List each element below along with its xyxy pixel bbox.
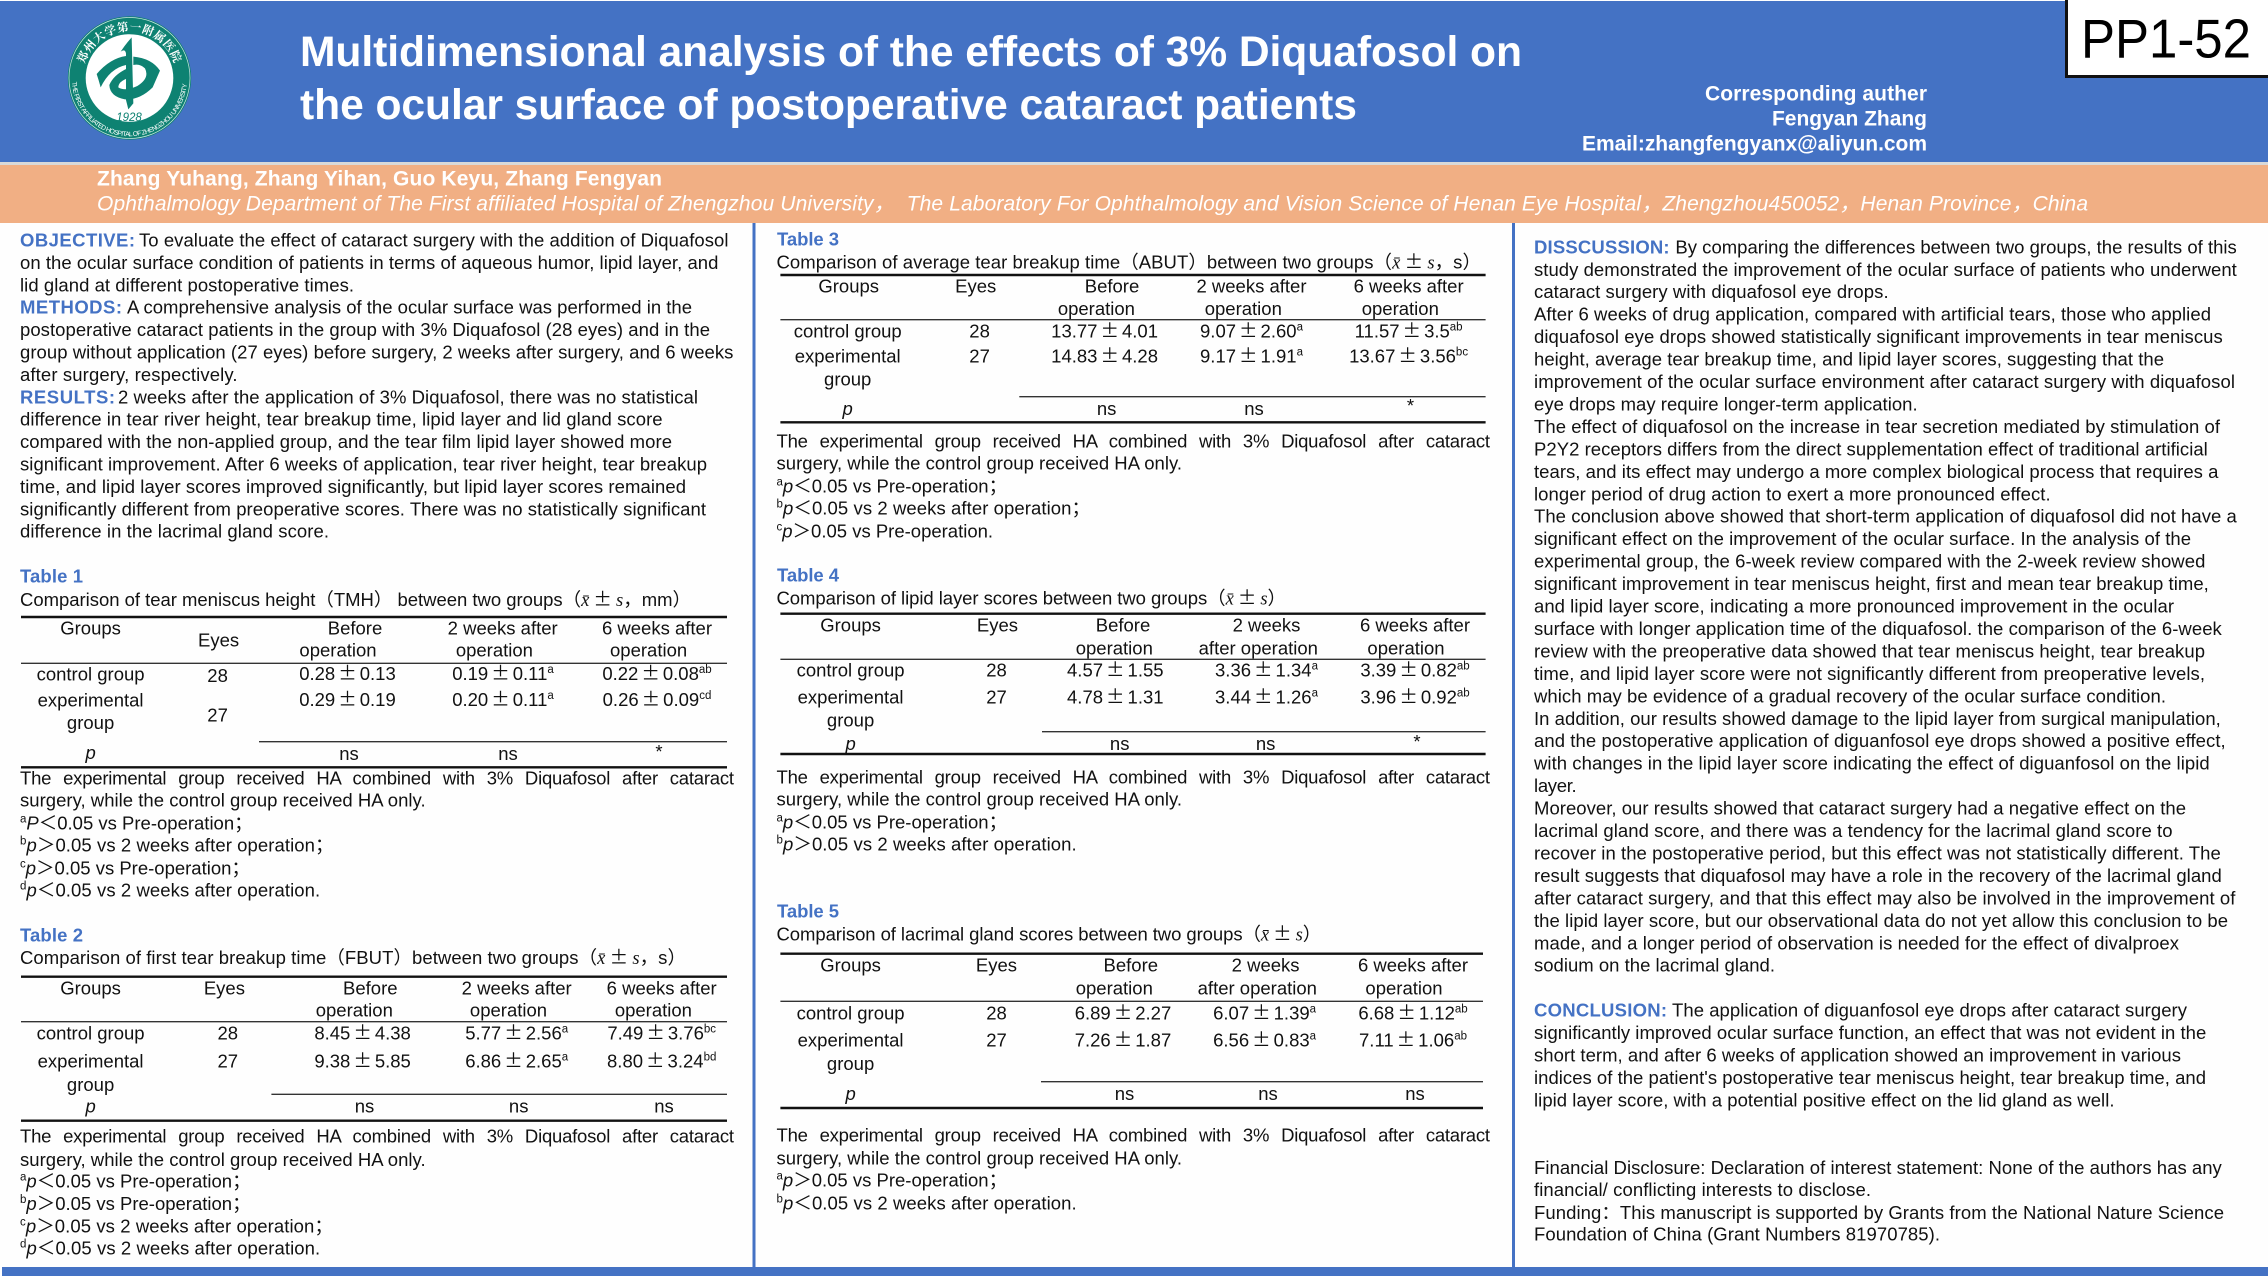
panel: disclosure and funding — [1534, 1157, 2224, 1244]
table 4 data: 28 — [986, 659, 1007, 680]
table 5 notes: ＜0.05 vs 2 weeks after operation. — [793, 1192, 1077, 1213]
table 2 data: ns — [355, 1096, 374, 1117]
affiliation: Ophthalmology Department of The First affiliated Hospital of Zhengzhou University， The Laboratory For Ophthalmology and Vision Science of Henan Eye Hospital，Zhengzhou450052，Henan Province，China — [97, 192, 2088, 216]
table 1 notes: ＜0.05 vs 2 weeks after operation. — [37, 880, 320, 901]
table 5 data: 6.56±0.83 — [1213, 1026, 1310, 1052]
table 4 data: 27 — [986, 687, 1007, 708]
table 1 data: 2 weeks after — [448, 618, 558, 639]
table 4 notes: b — [776, 834, 783, 846]
panel: conclusion: indices of the patient's postoperative tear meniscus height, tear breakup time, and — [1534, 1067, 2206, 1088]
table 3 notes: b — [776, 498, 783, 510]
table 4 data: 6 weeks after — [1360, 614, 1470, 635]
table 1 notes: ＜0.05 vs Pre-operation； — [39, 812, 253, 833]
table 5 data: 6.89±2.27 — [1075, 999, 1171, 1025]
table 1 notes: p — [25, 880, 37, 901]
panel: abstract: 2 weeks after the application of 3% Diquafosol, there was no statistical — [118, 386, 698, 407]
table 3 data: ns — [1244, 398, 1264, 419]
table 5 data: 27 — [986, 1029, 1007, 1050]
table 2 notes: p — [25, 1171, 37, 1192]
table 2 data: Eyes — [204, 978, 245, 999]
table 3 data: operation — [1205, 298, 1282, 319]
table 4 notes: ＞0.05 vs 2 weeks after operation. — [793, 833, 1077, 854]
table 2 data: Groups — [60, 978, 121, 999]
poster number box: PP1-52 — [2081, 8, 2251, 70]
table 5 notes: ＞0.05 vs Pre-operation； — [793, 1170, 1007, 1191]
table 3 data: a — [1297, 346, 1304, 358]
table 5 notes: p — [782, 1192, 793, 1213]
table 2 data: p — [84, 1096, 96, 1117]
table 2 notes: p — [25, 1215, 36, 1236]
panel: abstract: compared with the non-applied group, and the tear film lipid layer showed more — [20, 431, 672, 452]
table 2 data: 9.38±5.85 — [314, 1047, 411, 1073]
panel: discussion: significant improvement in tear meniscus height, first and mean tear breakup time, — [1534, 573, 2209, 594]
panel: abstract: METHODS: — [20, 297, 122, 318]
column dividers — [752, 223, 1515, 1267]
panel: abstract: postoperative cataract patients in the group with 3% Diquafosol (28 eyes) and in the — [20, 319, 710, 340]
table 1 notes: The experimental group received HA combined with 3% Diquafosol after cataract — [20, 768, 734, 789]
table 3 notes — [776, 430, 1490, 541]
table 3 data: operation — [1362, 298, 1439, 319]
table 4 data: 2 weeks — [1233, 614, 1300, 635]
panel: disclosure and funding: Financial Disclosure: Declaration of interest statement: None of the authors has any — [1534, 1157, 2223, 1178]
panel: discussion: Moreover, our results showed that cataract surgery had a negative effect on the — [1534, 798, 2186, 819]
panel: discussion: recover in the postoperative period, but this effect was not statistically different. The — [1534, 842, 2221, 864]
table 3 notes: surgery, while the control group received HA only. — [776, 452, 1182, 473]
table 2 data: bd — [704, 1051, 716, 1063]
table 1 data: a — [547, 690, 554, 702]
table 4 data: ns — [1110, 733, 1129, 754]
table 2 notes: d — [20, 1238, 26, 1250]
corresponding author: Fengyan Zhang — [1772, 108, 1927, 130]
table 4 data: 3.39±0.82 — [1360, 656, 1457, 682]
panel: table 2 — [20, 925, 734, 1258]
panel: discussion: made, and a longer period of observation is needed for the effect of divalproex — [1534, 932, 2180, 953]
table 3 data: bc — [1456, 346, 1468, 358]
table 5 data: 6 weeks after — [1358, 954, 1468, 975]
table 2 data: 2 weeks after — [462, 978, 572, 999]
table 4 caption: Comparison of lipid layer scores between two groups（x̄ ± s） — [776, 584, 1286, 610]
panel: discussion: improvement of the ocular surface environment after cataract surgery with diquafosol — [1534, 371, 2235, 392]
panel: discussion: sodium on the lacrimal gland. — [1534, 955, 1775, 976]
panel: discussion: and the postoperative application of diguanfosol eye drops showed a positive effect, — [1534, 730, 2226, 751]
table 5 data: operation — [1365, 977, 1443, 998]
table 1 data: 0.20±0.11 — [452, 686, 547, 712]
table 3 notes: a — [776, 476, 784, 488]
table 1 data: 0.19±0.11 — [452, 660, 547, 686]
panel: abstract: significant improvement. After 6 weeks of application, tear river height, tear breakup — [20, 454, 707, 474]
panel: abstract: on the ocular surface condition of patients in terms of aqueous humor, lipid layer, and — [20, 252, 718, 273]
table 3 data: ab — [1450, 321, 1463, 333]
table 3 notes: p — [781, 520, 793, 541]
panel: abstract: significantly different from preoperative scores. There was no statistically significant — [20, 498, 706, 519]
table 2 notes: b — [20, 1194, 26, 1206]
table 1 data: operation — [610, 640, 687, 661]
table 4 data: 3.44±1.26 — [1215, 684, 1312, 710]
table 1 data: 27 — [207, 705, 228, 726]
table 5 data: 28 — [986, 1002, 1007, 1023]
table 4 notes: a — [776, 812, 784, 824]
table 5 heading: Table 5 — [777, 900, 839, 921]
table 2 data: 7.49±3.76 — [607, 1019, 704, 1045]
title — [300, 28, 1522, 129]
table 3 data: Before — [1085, 275, 1139, 296]
table 4 data: * — [1413, 731, 1421, 752]
panel: discussion: By comparing the differences between two groups, the results of this — [1675, 236, 2237, 257]
table 5 data: 2 weeks — [1232, 954, 1300, 975]
table 1 notes: p — [25, 857, 36, 878]
panel: discussion: study demonstrated the improvement of the ocular surface of patients who underwent — [1534, 259, 2237, 280]
table 1 data: cd — [699, 690, 711, 702]
table 3 notes: The experimental group received HA combined with 3% Diquafosol after cataract — [776, 430, 1490, 451]
table 2 data: ns — [654, 1096, 674, 1117]
panel: discussion: experimental group, the 6-week review compared with the 2-week review showed — [1534, 551, 2205, 572]
table 2 notes: ＜0.05 vs 2 weeks after operation. — [37, 1237, 320, 1258]
table 3 heading: Table 3 — [777, 228, 839, 249]
table 2 data: 28 — [218, 1022, 238, 1043]
table 1 data: 0.29±0.19 — [299, 686, 396, 712]
table 3 notes: ＞0.05 vs Pre-operation. — [793, 520, 993, 541]
table 4 data: 3.96±0.92 — [1360, 684, 1457, 710]
table 2 data: 5.77±2.56 — [465, 1019, 562, 1045]
title: the ocular surface of postoperative cataract patients — [300, 81, 1357, 129]
panel: discussion: significant effect on the improvement of the ocular surface. In the analysis of the — [1534, 528, 2191, 549]
panel: discussion: the lipid layer score, but our observational data do not yet allow this conclusion to be — [1534, 910, 2228, 931]
panel: discussion: The conclusion above showed that short-term application of diquafosol did not have a — [1534, 506, 2238, 527]
panel: discussion: cataract surgery with diquafosol eye drops. — [1534, 281, 1889, 302]
table 1 notes: surgery, while the control group received HA only. — [20, 790, 426, 811]
table 5 data: 7.11±1.06 — [1359, 1026, 1454, 1052]
table 2 notes: ＞0.05 vs 2 weeks after operation； — [36, 1215, 333, 1236]
table 1 data: 28 — [207, 665, 228, 686]
panel: discussion: surface with longer application time of the diquafosol. the comparison of the 6-week — [1534, 618, 2223, 639]
table 1 data: 0.28±0.13 — [299, 660, 396, 686]
table 5 notes: p — [782, 1170, 793, 1191]
panel: discussion: lacrimal gland score, and there was a tendency for the lacrimal gland score to — [1534, 820, 2172, 841]
table 5 notes: The experimental group received HA combined with 3% Diquafosol after cataract — [776, 1125, 1490, 1146]
table 1 notes: c — [20, 858, 26, 870]
table 2 data: 6.86±2.65 — [465, 1047, 562, 1073]
table 4 data: ab — [1457, 660, 1470, 672]
panel: discussion: longer period of drug action to exert a more pronounced effect. — [1534, 483, 2051, 504]
table 4 data: Eyes — [977, 614, 1018, 635]
table 3 notes: ＜0.05 vs 2 weeks after operation； — [793, 497, 1090, 518]
authors: Zhang Yuhang, Zhang Yihan, Guo Keyu, Zhang Fengyan — [97, 168, 662, 190]
table 1 notes: b — [20, 836, 26, 848]
panel: abstract: difference in tear river height, tear breakup time, lipid layer and lid gland score — [20, 409, 663, 430]
table 5 data: ab — [1455, 1003, 1468, 1015]
table 2 data: 8.45±4.38 — [314, 1019, 411, 1045]
table 5 data: Before — [1104, 954, 1158, 975]
table 2 notes — [20, 1126, 734, 1258]
table 2 caption: Comparison of first tear breakup time（FBUT）between two groups（x̄ ± s，s） — [20, 944, 686, 970]
table 2 notes: ＞0.05 vs Pre-operation； — [37, 1193, 251, 1214]
table 3 data: 9.07±2.60 — [1200, 317, 1297, 343]
table 2 notes: a — [20, 1172, 27, 1184]
panel: conclusion: CONCLUSION: — [1534, 1000, 1667, 1021]
table 2 notes: p — [25, 1237, 37, 1258]
panel: disclosure and funding: financial/ conflicting interests to disclose. — [1534, 1179, 1871, 1200]
table 5 data: ns — [1405, 1083, 1425, 1104]
table 1 notes — [20, 768, 734, 901]
table 2 data: 27 — [218, 1050, 238, 1071]
panel: discussion: In addition, our results showed damage to the lipid layer from surgical manipulation, — [1534, 708, 2221, 729]
panel: discussion: layer. — [1534, 775, 1577, 796]
table 1 data: group — [67, 712, 114, 733]
table 3 data: group — [824, 369, 871, 390]
panel: abstract — [20, 230, 733, 542]
panel: discussion: height, average tear breakup time, and lipid layer scores, suggesting that the — [1534, 349, 2164, 370]
panel: abstract: time, and lipid layer scores improved significantly, but lipid layer scores remained — [20, 476, 686, 497]
table 1 data: 6 weeks after — [602, 618, 712, 639]
table 4 data: 4.57±1.55 — [1067, 656, 1164, 682]
table 1 notes: d — [20, 881, 26, 893]
panel: discussion: P2Y2 receptors differs from the direct supplementation effect of traditional artificial — [1534, 438, 2208, 459]
table 5 data: 7.26±1.87 — [1075, 1026, 1171, 1052]
bottom bar — [2, 1267, 2268, 1276]
table 4 data: experimental — [798, 687, 904, 708]
table 1 data: ns — [339, 743, 359, 764]
table 2 data: 6 weeks after — [607, 978, 717, 999]
table 2 data: operation — [316, 1000, 393, 1021]
table 3 notes: p — [782, 475, 793, 496]
table 5 data: ab — [1454, 1030, 1467, 1042]
table 2 data: operation — [470, 1000, 547, 1021]
table 4 notes: p — [782, 833, 793, 854]
table 5 data: a — [1310, 1030, 1317, 1042]
table 2 data: a — [562, 1023, 569, 1035]
table 1 data: Groups — [60, 618, 121, 639]
corresponding author: Corresponding auther — [1705, 82, 1927, 106]
table 3 data: a — [1297, 321, 1304, 333]
icon: hospital logo — [68, 16, 192, 140]
panel: abstract: RESULTS: — [20, 386, 115, 407]
panel: abstract: OBJECTIVE: — [20, 230, 135, 250]
panel: abstract: after surgery, respectively. — [20, 364, 238, 385]
table 4 data: 3.36±1.34 — [1215, 656, 1312, 682]
table 3 data — [780, 275, 1486, 422]
icon: hospital logo: 1928 — [116, 112, 142, 124]
table 2 notes: ＜0.05 vs Pre-operation； — [37, 1171, 251, 1192]
table 4 notes — [776, 766, 1490, 854]
table 5 data: experimental — [798, 1029, 904, 1050]
panel: discussion: diquafosol eye drops showed statistically significant improvements in tear meniscus — [1534, 326, 2223, 347]
panel: disclosure and funding: Funding：This manuscript is supported by Grants from the National Nature Science — [1534, 1202, 2224, 1223]
panel: conclusion: The application of diguanfosol eye drops after cataract surgery — [1672, 1000, 2188, 1021]
table 1 data — [21, 617, 727, 767]
table 5 data: 6.07±1.39 — [1213, 999, 1310, 1025]
panel: discussion: The effect of diquafosol on the increase in tear secretion mediated by stimulation of — [1534, 416, 2221, 437]
panel: discussion: DISSCUSSION: — [1534, 236, 1670, 257]
panel: conclusion: lipid layer score, with a potential positive effect on the lid gland as well. — [1534, 1089, 2114, 1110]
table 2 notes: c — [20, 1216, 26, 1228]
panel: abstract: lid gland at different postoperative times. — [20, 274, 354, 295]
table 4 data: operation — [1076, 637, 1153, 658]
table 4 data: control group — [797, 659, 905, 680]
panel: abstract: difference in the lacrimal gland score. — [20, 521, 329, 542]
panel: table 4 — [776, 564, 1490, 854]
panel: abstract: A comprehensive analysis of the ocular surface was performed in the — [127, 297, 692, 318]
table 4 data: Groups — [820, 614, 881, 635]
table 3 data: * — [1407, 395, 1414, 416]
table 3 data: 14.83±4.28 — [1051, 342, 1158, 368]
table 4 notes: The experimental group received HA combined with 3% Diquafosol after cataract — [776, 766, 1490, 787]
table 2 data: operation — [615, 1000, 692, 1021]
table 3 data: 9.17±1.91 — [1200, 342, 1297, 368]
table 3 data: ns — [1097, 398, 1116, 419]
table 5 data: control group — [797, 1002, 905, 1023]
table 1 data: operation — [299, 640, 377, 661]
table 3 data: 6 weeks after — [1354, 275, 1464, 296]
table 1 data: * — [655, 741, 663, 762]
table 4 data: ns — [1256, 733, 1275, 754]
table 2 data: 8.80±3.24 — [607, 1047, 704, 1073]
panel: discussion: with changes in the lipid layer score indicating the effect of diguanfosol on the lipid — [1533, 753, 2210, 774]
table 1 caption: Comparison of tear meniscus height（TMH） between two groups（x̄ ± s，mm） — [20, 586, 691, 612]
table 3 data: 13.67±3.56 — [1349, 342, 1456, 368]
table 5 data: after operation — [1198, 977, 1317, 998]
title: Multidimensional analysis of the effects of 3% Diquafosol on — [300, 28, 1522, 76]
table 3 caption: Comparison of average tear breakup time（ABUT）between two groups（x̄ ± s，s） — [776, 248, 1481, 274]
table 1 notes: p — [25, 835, 37, 856]
table 4 data: a — [1312, 688, 1319, 700]
table 3 data: control group — [794, 320, 902, 341]
table 1 notes: ＞0.05 vs Pre-operation； — [36, 857, 250, 878]
table 2 notes: The experimental group received HA combined with 3% Diquafosol after cataract — [20, 1126, 734, 1147]
table 5 data: operation — [1076, 977, 1153, 998]
table 5 data: ns — [1115, 1083, 1134, 1104]
table 2 data: bc — [704, 1023, 716, 1035]
corresponding author — [1582, 82, 1927, 156]
table 1 notes: P — [26, 812, 39, 833]
table 5 data: Groups — [820, 954, 881, 975]
panel: table 5 — [776, 900, 1490, 1213]
panel: discussion: result suggests that diquafosol may have a role in the recovery of the lacrimal gland — [1534, 865, 2222, 886]
table 2 data: experimental — [38, 1050, 144, 1071]
table 3 data: 11.57±3.5 — [1355, 317, 1450, 343]
icon: hospital logo: 郑州大学第一附属医院 — [76, 22, 182, 64]
table 3 data: 13.77±4.01 — [1051, 317, 1158, 343]
table 2 notes: surgery, while the control group received HA only. — [20, 1149, 426, 1170]
table 3 notes: ＜0.05 vs Pre-operation； — [793, 475, 1007, 496]
panel: discussion: After 6 weeks of drug application, compared with artificial tears, those who applied — [1534, 304, 2211, 325]
table 5 notes — [776, 1125, 1490, 1213]
table 5 data: 6.68±1.12 — [1358, 999, 1455, 1025]
table 4 data: ab — [1457, 688, 1470, 700]
table 1 data: 0.22±0.08 — [602, 660, 699, 686]
table 2 notes: p — [25, 1193, 37, 1214]
table 1 notes: a — [20, 813, 27, 825]
table 2 data: control group — [37, 1022, 145, 1043]
table 4 heading: Table 4 — [777, 564, 840, 585]
panel: conclusion: significantly improved ocular surface function, an effect that was not evident in the — [1534, 1022, 2206, 1043]
table 1 data: control group — [37, 664, 145, 685]
table 1 data: Before — [328, 618, 382, 639]
table 4 notes: p — [782, 811, 793, 832]
table 5 caption: Comparison of lacrimal gland scores between two groups（x̄ ± s） — [776, 921, 1321, 947]
table 4 data: a — [1312, 660, 1319, 672]
table 3 data: 2 weeks after — [1196, 275, 1307, 296]
table 5 data: ns — [1258, 1083, 1278, 1104]
table 1 notes: ＞0.05 vs 2 weeks after operation； — [37, 835, 334, 856]
corresponding author: Email:zhangfengyanx@aliyun.com — [1582, 132, 1927, 156]
table 3 data: experimental — [795, 345, 901, 366]
table 4 notes: surgery, while the control group received HA only. — [776, 789, 1182, 810]
table 1 heading: Table 1 — [20, 566, 83, 587]
table 5 notes: b — [776, 1193, 783, 1205]
icon: hospital logo: THE FIRST AFFILIATED HOSPITAL OF ZHENGZHOU UNIVERSITY — [72, 82, 187, 136]
table 3 data: p — [842, 398, 853, 419]
table 1 data: experimental — [38, 690, 144, 711]
table 1 data: a — [547, 664, 554, 676]
table 5 data: a — [1310, 1003, 1317, 1015]
table 3 data: 27 — [969, 345, 990, 366]
table 4 data: after operation — [1199, 637, 1318, 658]
table 3 notes: c — [776, 521, 782, 533]
table 4 data: Before — [1096, 614, 1150, 635]
panel: discussion: which may be evidence of a gradual recovery of the ocular surface condition. — [1533, 685, 2166, 706]
panel: table 1 — [20, 566, 734, 901]
table 2 data: Before — [343, 978, 398, 999]
panel: discussion: time, and lipid layer score were not significantly different from preoperative levels, — [1534, 663, 2205, 684]
table 5 data: group — [827, 1053, 874, 1074]
panel: discussion: and lipid layer score, indicating a more pronounced improvement in the ocular — [1534, 596, 2174, 616]
table 3 notes: p — [782, 497, 793, 518]
panel: conclusion: short term, and after 6 weeks of application showed an improvement in various — [1534, 1044, 2181, 1066]
panel: table 3 — [776, 228, 1490, 541]
table 1 data: ns — [498, 743, 518, 764]
table 2 data: a — [562, 1051, 569, 1063]
panel: abstract: group without application (27 eyes) before surgery, 2 weeks after surgery, and 6 weeks — [20, 342, 733, 362]
table 3 data: Groups — [818, 275, 879, 296]
table 3 data: 28 — [969, 320, 990, 341]
table 1 data: Eyes — [198, 630, 239, 651]
table 4 data: operation — [1367, 637, 1445, 658]
table 5 notes: surgery, while the control group received HA only. — [776, 1147, 1182, 1168]
table 4 notes: ＜0.05 vs Pre-operation； — [793, 811, 1007, 832]
panel: disclosure and funding: Foundation of China (Grant Numbers 81970785). — [1534, 1224, 1940, 1244]
table 5 data: p — [844, 1083, 856, 1104]
panel: discussion: review with the preoperative data showed that tear meniscus height, tear breakup — [1534, 640, 2205, 661]
panel: discussion: eye drops may require longer-term application. — [1534, 394, 1918, 414]
table 4 data: group — [827, 710, 874, 731]
table 2 heading: Table 2 — [20, 925, 83, 946]
table 2 data: ns — [509, 1096, 528, 1117]
table 4 data: 4.78±1.31 — [1067, 684, 1164, 710]
panel: conclusion — [1534, 1000, 2206, 1110]
panel: discussion — [1533, 236, 2238, 976]
author band — [0, 165, 2268, 223]
panel: discussion: after cataract surgery, and that this effect may also be involved in the improvement of — [1534, 887, 2236, 908]
panel: discussion: tears, and its effect may undergo a more complex biological process that requires a — [1534, 461, 2219, 482]
table 3 data: operation — [1058, 298, 1135, 319]
table 3 data: Eyes — [955, 275, 996, 296]
table 1 data: 0.26±0.09 — [603, 686, 699, 712]
table 5 notes: a — [776, 1171, 784, 1183]
table 5 data — [780, 954, 1483, 1108]
table 1 data: p — [84, 742, 96, 763]
table 1 data: operation — [456, 640, 533, 661]
table 4 data — [780, 614, 1486, 754]
table 2 data — [21, 977, 727, 1121]
table 4 data: p — [844, 733, 856, 754]
panel: abstract: To evaluate the effect of cataract surgery with the addition of Diquafosol — [139, 230, 728, 250]
table 5 data: Eyes — [976, 954, 1017, 975]
table 2 data: group — [67, 1074, 114, 1095]
table 1 data: ab — [699, 664, 712, 676]
header banner — [0, 1, 2268, 165]
